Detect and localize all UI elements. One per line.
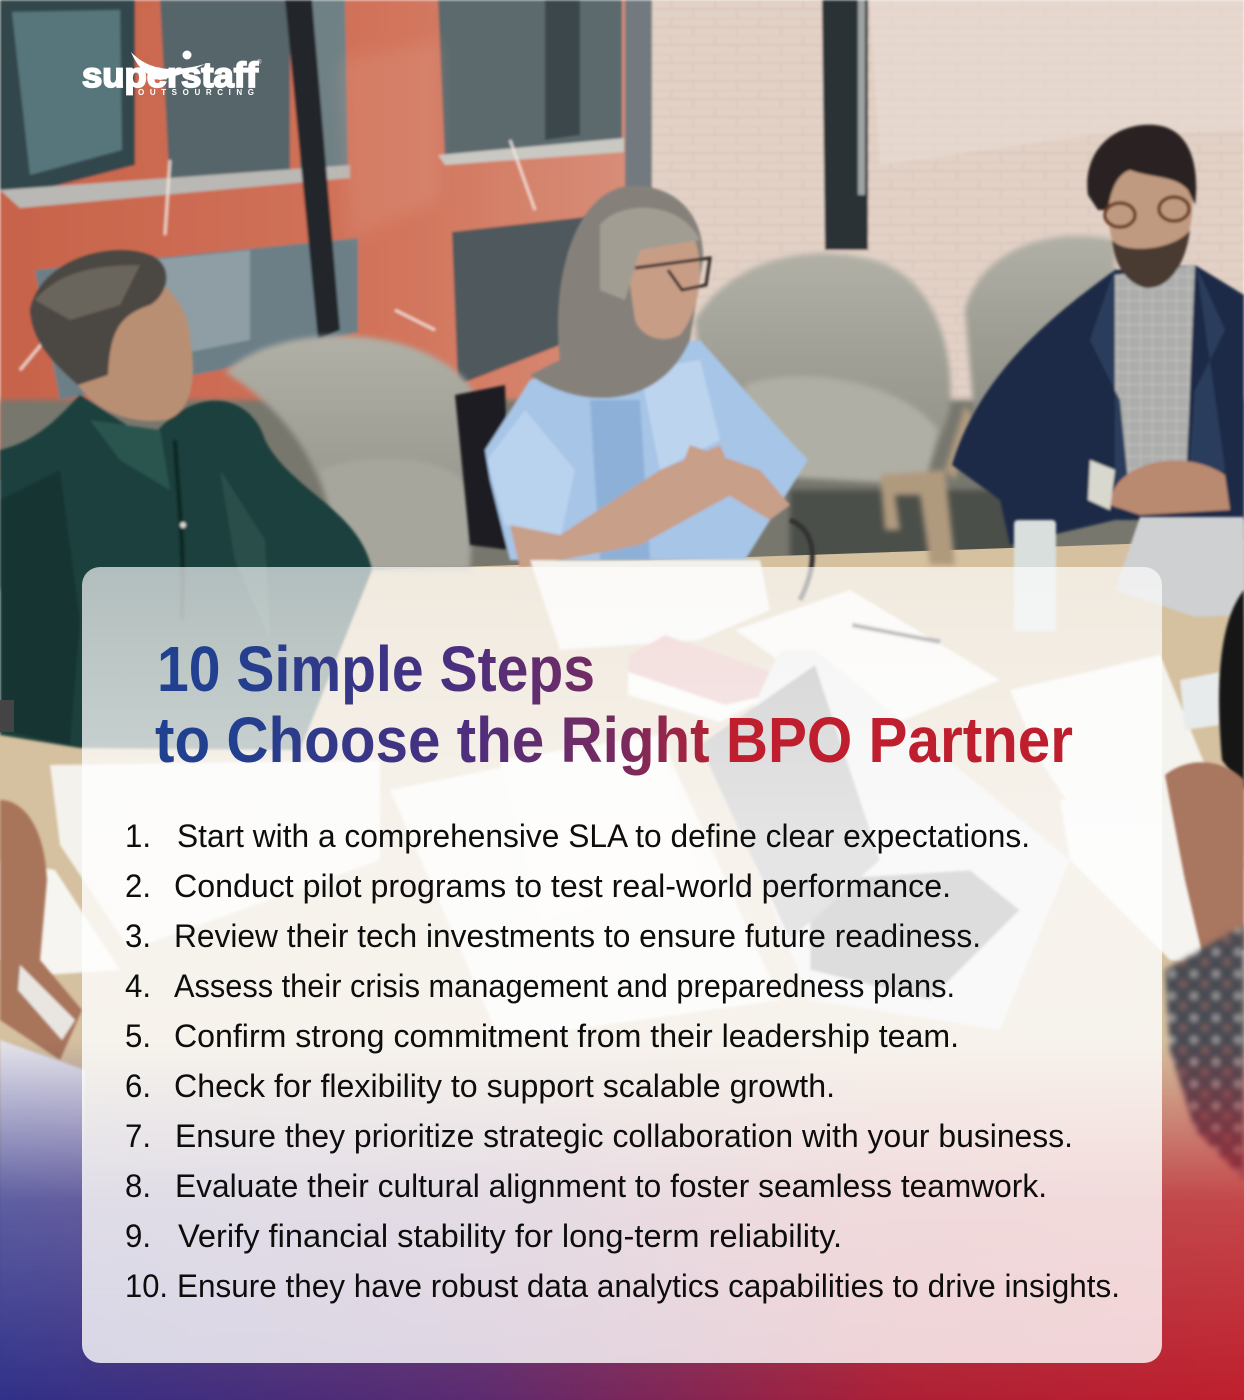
person: arm at right edge bbox=[1165, 590, 1244, 1180]
step 9: Verify financial stability for long-term reliability. bbox=[178, 1218, 842, 1254]
chairs bbox=[225, 236, 1115, 570]
step 6: Check for flexibility to support scalable growth. bbox=[174, 1068, 835, 1104]
floor behind chairs bbox=[0, 400, 1244, 590]
table items: laptop, glass, papers bbox=[0, 517, 1244, 1040]
step 9: 9. bbox=[125, 1218, 151, 1254]
step 1: 1. bbox=[125, 818, 151, 854]
logo swoosh and dot bbox=[131, 50, 205, 80]
step 8: Evaluate their cultural alignment to foster seamless teamwork. bbox=[175, 1168, 1047, 1204]
logo registered mark: ® bbox=[257, 59, 262, 66]
title bbox=[155, 633, 1073, 776]
step 5: 5. bbox=[125, 1018, 151, 1054]
step 4: 4. bbox=[125, 968, 151, 1004]
logo: superstaff outsourcing bbox=[82, 50, 262, 97]
title: 10 Simple Steps bbox=[157, 633, 595, 705]
window view: brick buildings bbox=[0, 0, 1244, 480]
step 1: Start with a comprehensive SLA to define clear expectations. bbox=[177, 818, 1030, 854]
step 10: 10. bbox=[125, 1268, 168, 1304]
step 5: Confirm strong commitment from their leadership team. bbox=[174, 1018, 959, 1054]
bottom colour gradient bbox=[0, 1040, 1244, 1400]
logo wordmark: superstaff bbox=[82, 56, 258, 95]
step 3: 3. bbox=[125, 918, 151, 954]
step 7: 7. bbox=[125, 1118, 151, 1154]
step 8: 8. bbox=[125, 1168, 151, 1204]
numbered list of 10 steps bbox=[125, 818, 1120, 1304]
step 6: 6. bbox=[125, 1068, 151, 1104]
table surface bbox=[0, 540, 1244, 1400]
logo tagline: OUTSOURCING bbox=[138, 88, 254, 97]
step 7: Ensure they prioritize strategic collaboration with your business. bbox=[175, 1118, 1073, 1154]
step 2: Conduct pilot programs to test real-world performance. bbox=[174, 868, 951, 904]
person: hands at left edge bbox=[0, 800, 85, 1400]
step 10: Ensure they have robust data analytics capabilities to drive insights. bbox=[177, 1268, 1120, 1304]
person: woman in centre bbox=[455, 186, 812, 600]
step 3: Review their tech investments to ensure future readiness. bbox=[174, 918, 981, 954]
step 2: 2. bbox=[125, 868, 151, 904]
title: to Choose the Right BPO Partner bbox=[155, 704, 1073, 776]
step 4: Assess their crisis management and preparedness plans. bbox=[174, 968, 955, 1004]
translucent white panel bbox=[82, 567, 1162, 1363]
person: man on left bbox=[0, 250, 372, 750]
person: man on right bbox=[952, 125, 1244, 545]
dark window sill bbox=[0, 700, 14, 732]
